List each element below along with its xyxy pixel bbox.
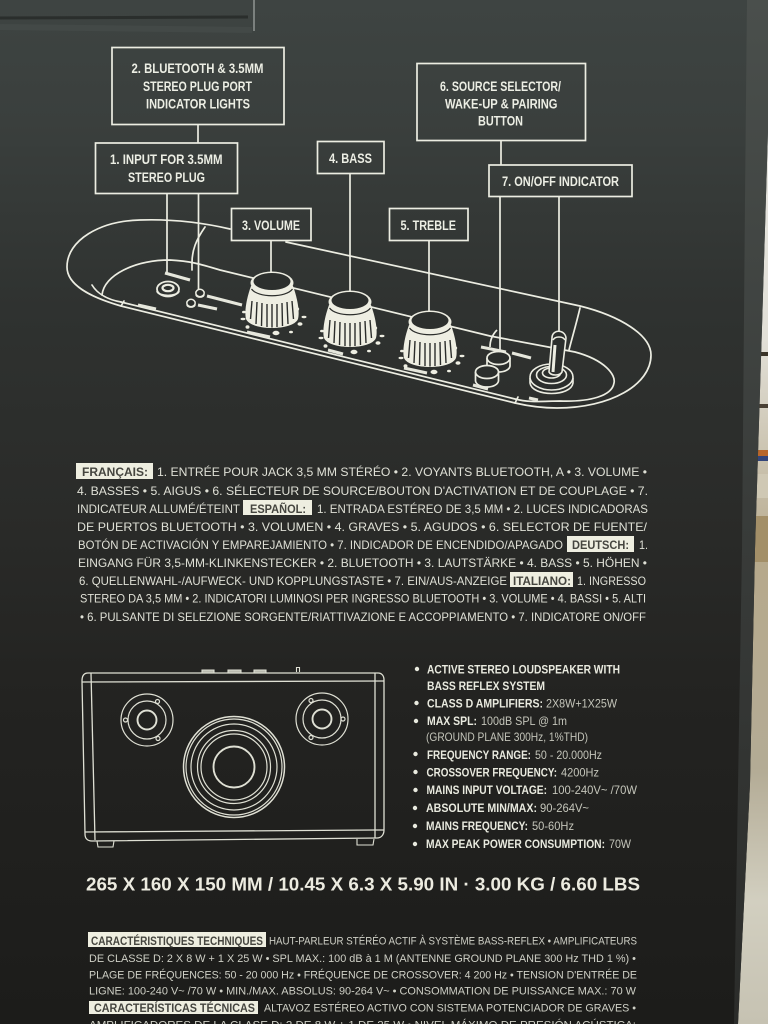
label box 2: indicator lights: 2. BLUETOOTH & 3.5MM	[132, 61, 264, 76]
heading tag: características técnicas: CARACTERÍSTICAS TÉCNICAS	[94, 1002, 255, 1015]
icon: indicator lights	[187, 289, 204, 307]
language tag: español: ESPAÑOL:	[250, 503, 306, 516]
multilingual control legend: BOTÓN DE ACTIVACIÓN Y EMPAREJAMIENTO • 7. INDICADOR DE ENCENDIDO/APAGADO	[78, 539, 563, 552]
multilingual control legend: 1. ENTRÉE POUR JACK 3,5 MM STÉRÉO • 2. VOYANTS BLUETOOTH, A • 3. VOLUME •	[157, 466, 647, 479]
icon: bass knob	[318, 290, 384, 354]
label box 6: source selector: BUTTON	[478, 114, 523, 128]
heading tag: caractéristiques techniques: CARACTÉRISTIQUES TECHNIQUES	[91, 935, 263, 948]
label box 4: bass	[318, 142, 384, 174]
left tweeter	[121, 694, 173, 746]
specifications list: 90-264V~	[540, 801, 589, 815]
technical characteristics text: LIGNE: 100-240 V~ /70 W • MIN./MAX. ABSOLUS: 90-264 V~ • CONSOMMATION DE PUISSANCE MAX.: 70 W	[89, 986, 636, 998]
language tag: italiano: ITALIANO:	[513, 575, 571, 588]
specifications list: BASS REFLEX SYSTEM	[427, 679, 545, 693]
specifications list: 2X8W+1X25W	[546, 696, 618, 710]
label box 6: source selector: 6. SOURCE SELECTOR/	[440, 79, 561, 94]
icon: source selector buttons	[476, 330, 510, 387]
label box 2: indicator lights: STEREO PLUG PORT	[143, 79, 253, 94]
controls diagram	[67, 48, 651, 408]
multilingual control legend: 1.	[639, 539, 648, 552]
right tweeter	[296, 693, 348, 745]
label box 1: input	[96, 143, 238, 194]
dimensions and weight: 265 X 160 X 150 MM / 10.45 X 6.3 X 5.90 IN · 3.00 KG / 6.60 LBS	[86, 874, 640, 894]
specifications list: 100-240V~ /70W	[552, 783, 638, 797]
specifications list: FREQUENCY RANGE:	[427, 748, 531, 762]
specifications list: 70W	[609, 837, 632, 851]
technical characteristics text: ALTAVOZ ESTÉREO ACTIVO CON SISTEMA POTENCIADOR DE GRAVES •	[264, 1002, 636, 1014]
icon: on/off toggle	[530, 331, 573, 394]
specifications list: CLASS D AMPLIFIERS:	[427, 696, 543, 710]
icon: volume knob	[240, 272, 306, 335]
technical characteristics text: HAUT-PARLEUR STÉRÉO ACTIF À SYSTÈME BASS-REFLEX • AMPLIFICATEURS	[269, 934, 637, 948]
multilingual control legend: 4. BASSES • 5. AIGUS • 6. SÉLECTEUR DE SOURCE/BOUTON D'ACTIVATION ET DE COUPLAGE • 7.	[77, 485, 648, 498]
label box 2: indicator lights	[112, 48, 284, 124]
speaker front line drawing	[82, 668, 384, 847]
speaker cabinet	[82, 673, 384, 841]
multilingual control legend: • 6. PULSANTE DI SELEZIONE SORGENTE/RIATTIVAZIONE E ACCOPPIAMENTO • 7. INDICATORE ON/OFF	[80, 611, 646, 624]
language tag: español	[243, 500, 312, 516]
specifications list: 50 - 20.000Hz	[535, 748, 602, 762]
connector lines	[167, 125, 559, 353]
specifications list: (GROUND PLANE 300Hz, 1%THD)	[426, 730, 588, 744]
multilingual control legend: 6. QUELLENWAHL-/AUFWECK- UND KOPPLUNGSTASTE • 7. EIN/AUS-ANZEIGE	[79, 575, 507, 588]
label box 7: on/off indicator: 7. ON/OFF INDICATOR	[502, 174, 619, 189]
language tag: français	[76, 463, 153, 479]
multilingual control legend: 1. ENTRADA ESTÉREO DE 3,5 MM • 2. LUCES INDICADORAS	[317, 503, 648, 516]
label box 3: volume: 3. VOLUME	[242, 218, 300, 233]
multilingual control legend: INDICATEUR ALLUMÉ/ÉTEINT	[77, 503, 240, 516]
label box 2: indicator lights: INDICATOR LIGHTS	[146, 96, 250, 112]
multilingual control legend: STEREO DA 3,5 MM • 2. INDICATORI LUMINOSI PER INGRESSO BLUETOOTH • 3. VOLUME • 4. BASSI • 5. ALTI	[80, 592, 646, 606]
technical characteristics text: PLAGE DE FRÉQUENCES: 50 - 20 000 Hz • FRÉQUENCE DE CROSSOVER: 4 200 Hz • TENSION D'ENTRÉE DE	[89, 968, 637, 982]
label box 6: source selector: WAKE-UP & PAIRING	[445, 96, 558, 112]
multilingual control legend: 1. INGRESSO	[577, 575, 646, 588]
speaker top panel outline	[67, 220, 651, 408]
woofer	[184, 716, 284, 818]
technical characteristics text: DE CLASSE D: 2 X 8 W + 1 X 25 W • SPL MAX.: 100 dB à 1 M (ANTENNE GROUND PLANE 300 Hz THD 1 %) •	[89, 953, 636, 965]
specifications list: MAINS INPUT VOLTAGE:	[426, 783, 547, 797]
specifications list: 100dB SPL @ 1m	[481, 714, 567, 728]
label box 3: volume	[232, 208, 311, 240]
specifications list: CROSSOVER FREQUENCY:	[426, 766, 557, 780]
multilingual control legend: EINGANG FÜR 3,5-MM-KLINKENSTECKER • 2. BLUETOOTH • 3. LAUTSTÄRKE • 4. BASS • 5. HÖHEN •	[78, 557, 647, 570]
store background behind box	[725, 0, 768, 1024]
specifications list: MAX PEAK POWER CONSUMPTION:	[426, 837, 605, 851]
silk-screen dash marks	[138, 273, 538, 400]
label box 4: bass: 4. BASS	[329, 151, 372, 166]
top buttons and feet	[97, 668, 374, 847]
label box 1: input: STEREO PLUG	[128, 170, 205, 185]
label box 1: input: 1. INPUT FOR 3.5MM	[110, 152, 222, 167]
language tag: français: FRANÇAIS:	[82, 466, 148, 479]
language tag: deutsch: DEUTSCH:	[572, 539, 629, 552]
specifications list: ACTIVE STEREO LOUDSPEAKER WITH	[427, 662, 620, 676]
specifications list: MAX SPL:	[427, 714, 477, 728]
icon: treble knob	[398, 310, 464, 374]
specifications list: ABSOLUTE MIN/MAX:	[426, 801, 537, 815]
specifications list	[413, 662, 638, 851]
specifications list: 4200Hz	[561, 766, 599, 780]
label box 6: source selector	[417, 64, 586, 140]
label box 7: on/off indicator	[489, 165, 632, 196]
specifications list: 50-60Hz	[532, 819, 574, 833]
multilingual control legend	[76, 463, 648, 624]
specifications list: MAINS FREQUENCY:	[426, 819, 528, 833]
technical characteristics text	[88, 932, 637, 1024]
multilingual control legend: DE PUERTOS BLUETOOTH • 3. VOLUMEN • 4. GRAVES • 5. AGUDOS • 6. SELECTOR DE FUENTE/	[77, 521, 648, 534]
icon: 3.5mm input jack	[157, 282, 179, 296]
label box 5: treble: 5. TREBLE	[400, 218, 456, 233]
spec bullets	[413, 667, 419, 846]
label box 5: treble	[390, 208, 468, 240]
